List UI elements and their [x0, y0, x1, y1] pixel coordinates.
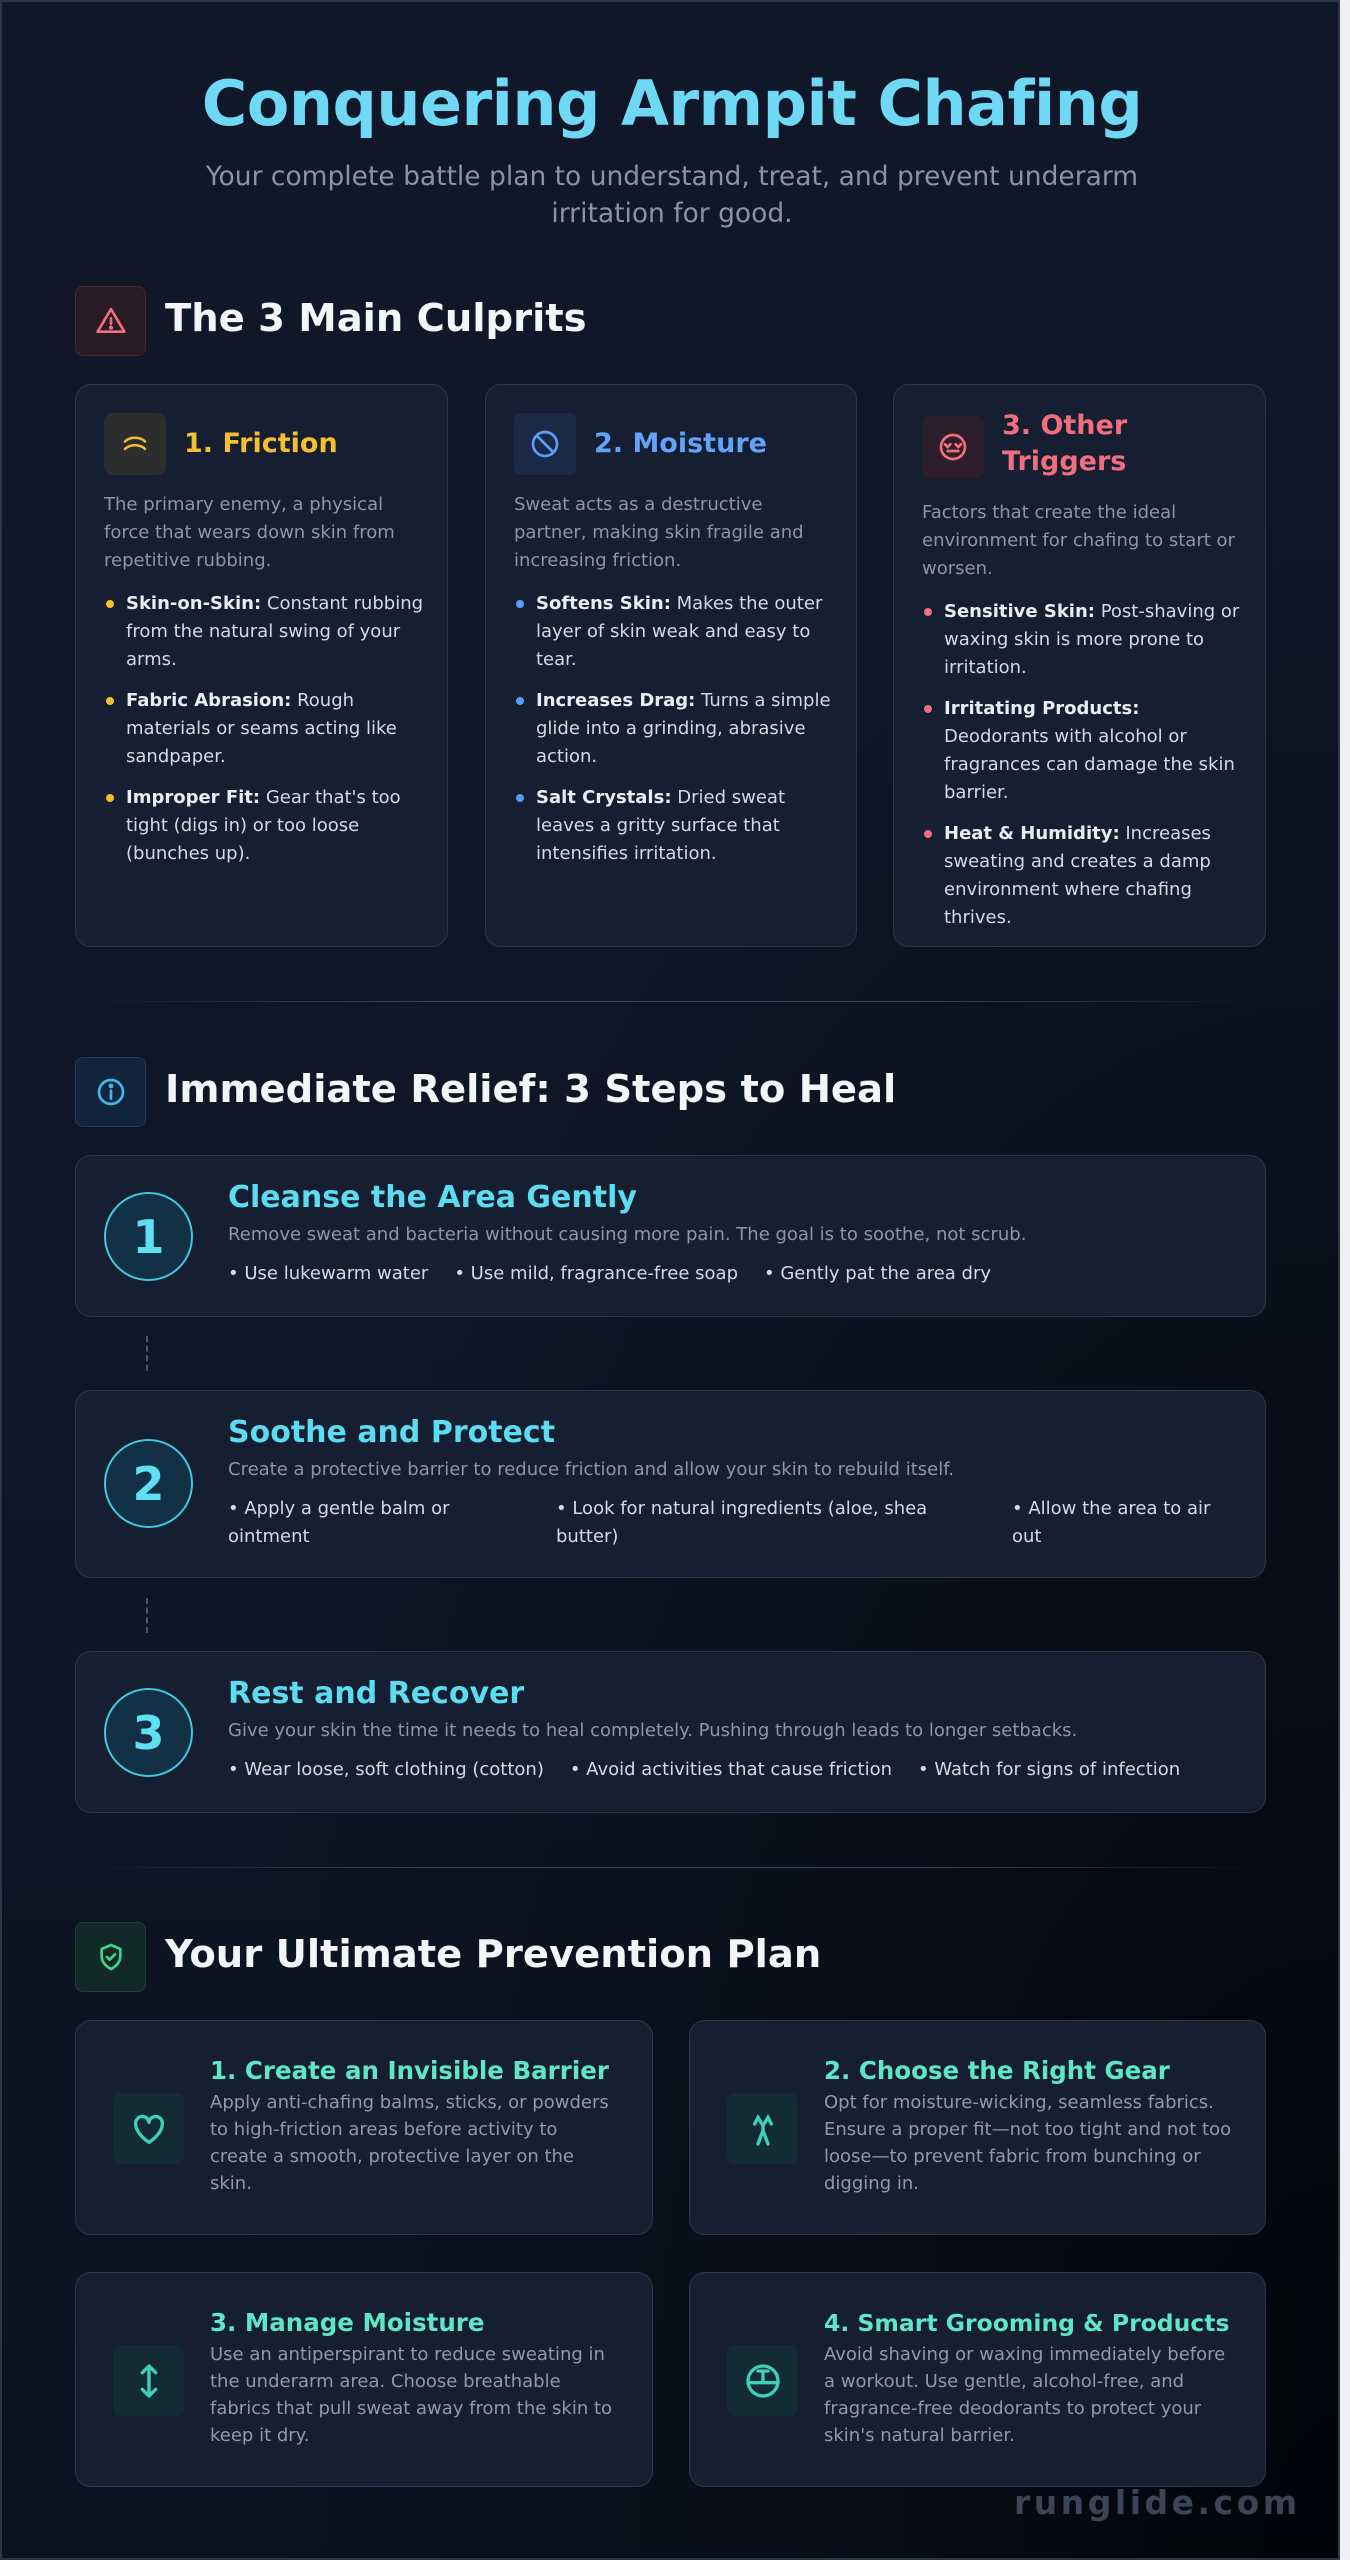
icon: warning: [75, 286, 146, 356]
bullets: moisture: Increases Drag: Turns a simple glide into a grinding, abrasive action.: [536, 690, 831, 767]
icon: arrows: [113, 2345, 184, 2416]
step 3 title: Rest and Recover: [228, 1676, 524, 1711]
icon: razor: [727, 2345, 798, 2416]
title: 2. Choose the Right Gear: [824, 2056, 1170, 2085]
step 3 bullets: • Watch for signs of infection: [918, 1759, 1180, 1780]
step 1 bullets: [228, 1263, 991, 1284]
title: Conquering Armpit Chafing: [202, 67, 1142, 140]
watermark: runglide.com: [1014, 2483, 1301, 2522]
title: triggers: 3. Other Triggers: [1002, 410, 1127, 477]
icon: heart: [113, 2093, 184, 2164]
desc: triggers: Factors that create the ideal environment for chafing to start or worsen.: [922, 502, 1235, 579]
step 2 bullets: • Look for natural ingredients (aloe, shea butter): [556, 1498, 927, 1547]
bullets: friction: Improper Fit: Gear that's too tight (digs in) or too loose (bunches up).: [126, 787, 401, 864]
step 3 bullets: • Wear loose, soft clothing (cotton): [228, 1759, 544, 1780]
step 2 desc: Create a protective barrier to reduce friction and allow your skin to rebuild itself.: [228, 1459, 954, 1480]
step 2: [75, 1390, 1266, 1578]
bullets: moisture: [516, 593, 831, 864]
bullets: triggers: Heat & Humidity: Increases sweating and creates a damp environment where chafing thrives.: [944, 823, 1211, 928]
desc: Apply anti-chafing balms, sticks, or powders to high-friction areas before activity to create a smooth, protective layer on the skin.: [210, 2092, 609, 2194]
title: 3. Manage Moisture: [210, 2308, 485, 2337]
number 1: [104, 1192, 193, 1281]
number 2: 2: [132, 1456, 164, 1510]
icon: gear: [727, 2093, 798, 2164]
bullets: friction: Fabric Abrasion: Rough materials or seams acting like sandpaper.: [126, 690, 397, 767]
title: 4. Smart Grooming & Products: [824, 2309, 1230, 2337]
step 1 title: Cleanse the Area Gently: [228, 1180, 637, 1215]
desc: Use an antiperspirant to reduce sweating in the underarm area. Choose breathable fabrics that pull sweat away from the skin to keep it dry.: [210, 2344, 612, 2446]
step 3: [75, 1651, 1266, 1813]
number 3: 3: [132, 1706, 164, 1760]
step 3 desc: Give your skin the time it needs to heal completely. Pushing through leads to longer setbacks.: [228, 1720, 1077, 1741]
number 3: [104, 1688, 193, 1777]
bullets: moisture: Softens Skin: Makes the outer layer of skin weak and easy to tear.: [536, 593, 822, 670]
bullets: moisture: Salt Crystals: Dried sweat leaves a gritty surface that intensifies irritation.: [536, 787, 785, 864]
prevention 4: [689, 2272, 1266, 2487]
step 2 bullets: • Apply a gentle balm or ointment: [228, 1498, 450, 1547]
bullets: friction: Skin-on-Skin: Constant rubbing from the natural swing of your arms.: [126, 593, 423, 670]
subtitle: Your complete battle plan to understand, treat, and prevent underarm irritation for good.: [206, 161, 1138, 229]
icon: moisture: [514, 413, 576, 475]
desc: Avoid shaving or waxing immediately before a workout. Use gentle, alcohol-free, and fragrance-free deodorants to protect your skin's natural barrier.: [824, 2344, 1225, 2446]
bullets: triggers: [924, 601, 1240, 928]
step 3 bullets: [228, 1759, 1180, 1780]
panel: friction: [75, 384, 448, 947]
desc: Opt for moisture-wicking, seamless fabrics. Ensure a proper fit—not too tight and not too loose—to prevent fabric from bunching or digging in.: [824, 2092, 1231, 2194]
icon: triggers: [922, 416, 984, 478]
title: 1. Create an Invisible Barrier: [210, 2056, 609, 2085]
heading: prevention: Your Ultimate Prevention Plan: [165, 1932, 821, 1977]
bullets: triggers: Sensitive Skin: Post-shaving or waxing skin is more prone to irritation.: [944, 601, 1239, 678]
step 2 bullets: • Allow the area to air out: [1012, 1498, 1210, 1547]
panel: other triggers: [893, 384, 1266, 947]
desc: friction: The primary enemy, a physical force that wears down skin from repetitive rubbing.: [104, 494, 395, 571]
prevention 1: [75, 2020, 653, 2235]
step 2 bullets: [228, 1498, 1210, 1547]
icon: friction: [104, 413, 166, 475]
step 2 title: Soothe and Protect: [228, 1415, 555, 1450]
prevention 3: [75, 2272, 653, 2487]
step 1 bullets: • Use mild, fragrance-free soap: [454, 1263, 738, 1284]
prevention 2: [689, 2020, 1266, 2235]
title: moisture: 2. Moisture: [594, 428, 767, 459]
step 1 desc: Remove sweat and bacteria without causing more pain. The goal is to soothe, not scrub.: [228, 1224, 1026, 1245]
step 1 bullets: • Gently pat the area dry: [764, 1263, 991, 1284]
icon: shield: [75, 1922, 146, 1992]
heading: relief: Immediate Relief: 3 Steps to Heal: [165, 1067, 896, 1112]
step 1: [75, 1155, 1266, 1317]
heading: culprits: The 3 Main Culprits: [165, 296, 587, 341]
step 1 bullets: • Use lukewarm water: [228, 1263, 428, 1284]
title: friction: 1. Friction: [184, 428, 338, 459]
icon: info: [75, 1057, 146, 1127]
number 1: 1: [132, 1210, 164, 1264]
bullets: friction: [106, 593, 423, 864]
bullets: triggers: Irritating Products: Deodorants with alcohol or fragrances can damage the skin barrier.: [944, 698, 1235, 803]
number 2: [104, 1439, 193, 1528]
step 3 bullets: • Avoid activities that cause friction: [570, 1759, 892, 1780]
desc: moisture: Sweat acts as a destructive partner, making skin fragile and increasing friction.: [514, 494, 804, 571]
panel: moisture: [485, 384, 857, 947]
